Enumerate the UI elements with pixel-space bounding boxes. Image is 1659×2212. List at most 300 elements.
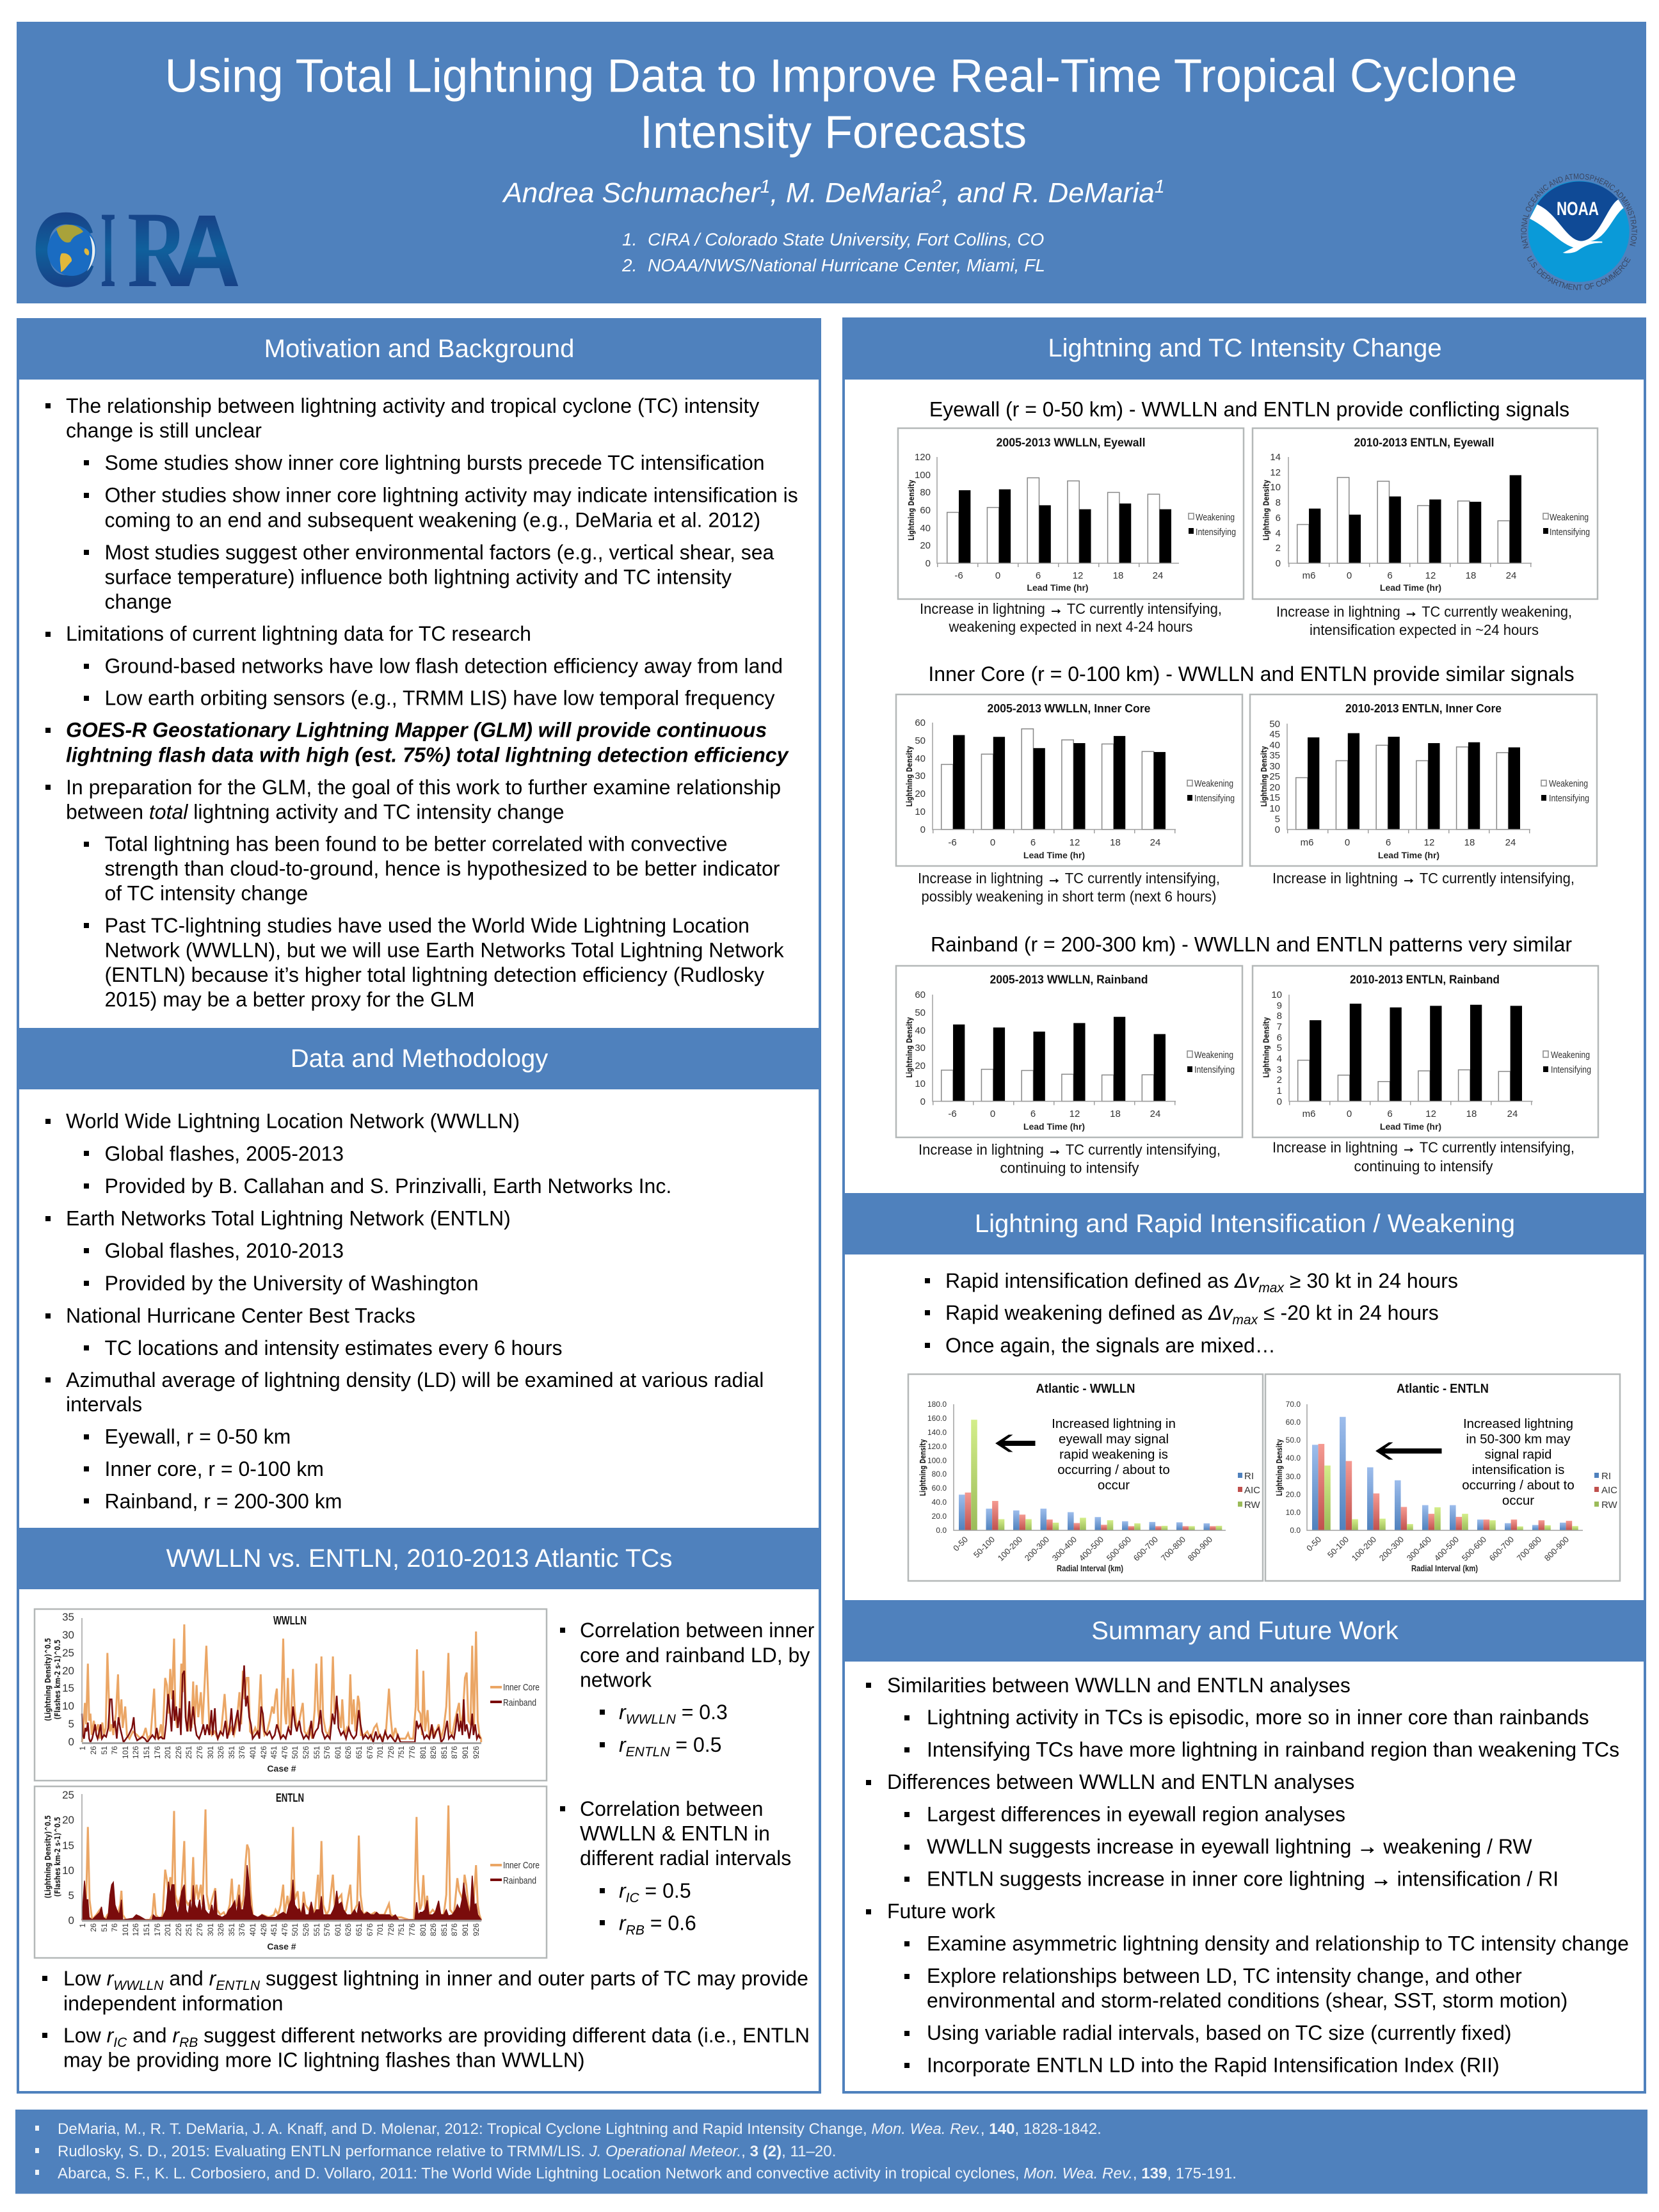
legend [1594, 1471, 1618, 1511]
annotation: occurring / about to [1462, 1478, 1575, 1493]
legend [1543, 512, 1590, 538]
axis titles: Lead Time (hr) [1023, 850, 1085, 860]
axis titles: Lightning Density [905, 746, 914, 806]
annotation [1462, 1416, 1575, 1508]
text block: rapid intensification bullets [925, 1269, 1458, 1357]
legend: RW [1244, 1500, 1261, 1511]
subheading: rainband: Rainband (r = 200-300 km) - WWLLN and ENTLN patterns very similar [931, 933, 1572, 956]
arrow [1376, 1443, 1441, 1459]
y ticks: 80 [920, 487, 931, 498]
x axis case labels: 251 [184, 1923, 193, 1936]
y ticks: 60.0 [1286, 1418, 1301, 1427]
legend: Inner Core [503, 1682, 540, 1693]
legend [1187, 778, 1235, 804]
text block: data bullets: TC locations and intensity estimates every 6 hours [105, 1336, 562, 1359]
legend [1541, 778, 1589, 804]
x ticks: 12 [1424, 837, 1434, 848]
x axis case labels: 851 [440, 1746, 449, 1759]
text block: rapid intensification bullets: Rapid weakening defined as Δv [945, 1301, 1232, 1324]
text block: correlation bullets: r [619, 1879, 627, 1902]
affiliations: CIRA / Colorado State University, Fort Collins, CO [648, 229, 1044, 250]
legend [1187, 1050, 1235, 1075]
y ticks [915, 452, 931, 569]
chart title: 2010-2013 ENTLN, Inner Core [1345, 702, 1502, 715]
icon: CIRA logo: R [127, 189, 189, 310]
y ticks: 40 [920, 523, 931, 534]
x axis case labels: 476 [280, 1746, 289, 1759]
x ticks: -6 [954, 570, 963, 581]
x axis case labels: 926 [472, 1746, 481, 1759]
y ticks: 0 [926, 558, 931, 569]
axis titles [907, 479, 1089, 593]
legend: Weakening [1549, 778, 1588, 789]
y ticks: 10 [1271, 990, 1282, 1000]
text block: low correlation bullets: IC [113, 2035, 127, 2050]
x ticks: 700-800 [1159, 1535, 1187, 1563]
y ticks: 20.0 [1286, 1490, 1301, 1499]
caption: rainband ENTLN: continuing to intensify [1354, 1158, 1493, 1174]
y axis labels [62, 1611, 74, 1748]
x axis case labels: 576 [323, 1923, 332, 1936]
text block: correlation bullets: network [580, 1668, 652, 1691]
annotation: rapid weakening is [1059, 1447, 1168, 1462]
x axis case labels: 101 [121, 1746, 130, 1759]
panel: title header [17, 22, 1646, 310]
caption: rainband ENTLN [1272, 1139, 1575, 1174]
text block: summary bullets: Future work [887, 1900, 996, 1923]
x axis case labels: 26 [89, 1746, 98, 1754]
heading: Data and Methodology [17, 1028, 821, 1089]
y ticks: 140.0 [927, 1428, 947, 1437]
y ticks: 45 [1269, 729, 1280, 740]
y axis labels [62, 1789, 74, 1927]
y axis labels: 10 [62, 1864, 74, 1877]
text block: data bullets: intervals [66, 1393, 142, 1416]
y ticks: 4 [1277, 1054, 1282, 1064]
x ticks: 6 [1030, 837, 1036, 848]
annotation: signal rapid [1485, 1447, 1551, 1462]
x axis case labels: 501 [291, 1923, 300, 1936]
axis titles: Lightning Density [905, 1017, 914, 1078]
x ticks: 6 [1387, 1109, 1393, 1119]
heading: WWLLN vs. ENTLN: WWLLN vs. ENTLN, 2010-2013 Atlantic TCs [166, 1544, 672, 1573]
chart: ENTLN time series [35, 1786, 547, 1958]
axis titles [905, 746, 1085, 860]
x axis case labels: 1 [78, 1923, 87, 1928]
y ticks: 1 [1277, 1086, 1282, 1096]
text block: motivation bullets: lightning flash data with high (est. 75%) total lightning detection efficiency [66, 744, 790, 767]
x axis case labels: 176 [153, 1746, 162, 1759]
text block: motivation bullets: Some studies show inner core lightning bursts precede TC intensification [105, 451, 765, 474]
series: inner core [82, 1806, 481, 1920]
axis titles: Radial Interval (km) [1411, 1563, 1478, 1573]
heading: Lightning and TC Intensity Change: Lightning and TC Intensity Change [1048, 334, 1442, 362]
legend: RI [1601, 1471, 1611, 1482]
y ticks: 40 [915, 753, 926, 764]
series: rainband [82, 1865, 481, 1920]
text block: motivation bullets: between total lightning activity and TC intensity change [66, 800, 565, 823]
x ticks: 200-300 [1023, 1535, 1051, 1563]
axis titles [1262, 479, 1441, 593]
chart title: 2005-2013 WWLLN, Inner Core [987, 702, 1151, 715]
text block: summary bullets: WWLLN suggests increase in eyewall lightning → weakening / RW [927, 1835, 1532, 1858]
text block: motivation bullets: Ground-based networks have low flash detection efficiency away from land [105, 654, 783, 677]
text block: low correlation bullets: independent information [63, 1992, 283, 2015]
text block: rapid intensification bullets: Rapid intensification defined as Δv [945, 1269, 1258, 1292]
axis titles [905, 1017, 1085, 1132]
x ticks: 50-100 [1326, 1535, 1350, 1560]
text block: correlation bullets: Correlation between inner [580, 1619, 815, 1642]
y ticks [1286, 1400, 1301, 1535]
y ticks: 12 [1270, 467, 1281, 478]
x ticks: 600-700 [1132, 1535, 1160, 1563]
text block: low correlation bullets: r [172, 2024, 180, 2047]
x axis case labels: 726 [387, 1746, 396, 1759]
x axis case labels: 426 [259, 1746, 268, 1759]
x axis case labels: 601 [333, 1746, 342, 1759]
caption: rainband WWLLN: Increase in lightning → TC currently intensifying, [918, 1141, 1221, 1158]
y ticks: 80.0 [932, 1470, 947, 1479]
axis titles: Lightning Density [1275, 1439, 1284, 1496]
text block: correlation bullets: ENTLN [626, 1745, 670, 1759]
authors: 1 [1155, 177, 1165, 197]
text block: low correlation bullets: Low r [63, 1967, 113, 1990]
axis titles: Lightning Density [1262, 479, 1271, 540]
x ticks: 0 [1347, 570, 1352, 581]
x axis case labels: 526 [301, 1923, 310, 1936]
y axis title [44, 1638, 62, 1721]
y ticks [927, 1400, 947, 1535]
y ticks: 7 [1277, 1022, 1282, 1032]
x ticks: 500-600 [1460, 1535, 1488, 1563]
axis titles [1260, 746, 1439, 860]
text block: low correlation bullets: r [209, 1967, 217, 1990]
y axis labels: 5 [68, 1889, 74, 1902]
text block: reference list: Abarca, S. F., K. L. Corbosiero, and D. Vollaro, 2011: The World Wide Lightning Location Network and convective activity in tropical cyclones, Mon. Wea. Rev., 139, 175-191. [58, 2165, 1237, 2183]
x ticks: 24 [1150, 837, 1160, 848]
legend: Intensifying [1550, 527, 1590, 538]
x axis case labels: 476 [280, 1923, 289, 1936]
legend: Weakening [1551, 1050, 1590, 1061]
y ticks: 10 [915, 806, 926, 817]
text block: data bullets: Azimuthal average of lightning density (LD) will be examined at various radial [66, 1368, 764, 1391]
y ticks: 20.0 [932, 1512, 947, 1521]
text block: correlation bullets: different radial intervals [580, 1847, 791, 1870]
y ticks: 14 [1270, 452, 1281, 463]
heading: Lightning and TC Intensity Change [842, 317, 1646, 380]
panel: references [15, 2110, 1647, 2194]
affiliations: 1. [622, 229, 637, 250]
y ticks: 0 [1277, 1096, 1282, 1107]
text block: low correlation bullets: suggest lightning in inner and outer parts of TC may provide [260, 1967, 808, 1990]
x axis case labels: 426 [259, 1923, 268, 1936]
y ticks: 8 [1277, 1011, 1282, 1022]
x ticks: 0 [1345, 837, 1350, 848]
x ticks: 24 [1153, 570, 1163, 581]
chart title: ENTLN [276, 1791, 304, 1804]
annotation [1052, 1416, 1176, 1493]
x ticks: -6 [948, 1109, 957, 1119]
x axis case labels: 676 [365, 1923, 374, 1936]
bars [959, 1420, 1222, 1530]
axis titles: Lead Time (hr) [1380, 1121, 1441, 1132]
legend: Rainband [503, 1697, 536, 1708]
y ticks: 60 [915, 990, 926, 1000]
legend [1543, 1050, 1591, 1075]
y axis labels: 0 [68, 1736, 74, 1748]
x axis case labels: 326 [216, 1923, 225, 1936]
x ticks: 12 [1070, 837, 1080, 848]
text block: low correlation bullets: may be providing more IC lightning flashes than WWLLN) [63, 2049, 585, 2072]
y axis labels: 5 [68, 1718, 74, 1730]
annotation: occurring / about to [1057, 1463, 1170, 1477]
x axis case labels: 176 [153, 1923, 162, 1936]
text block: rapid intensification bullets: Once again, the signals are mixed… [945, 1334, 1276, 1357]
bars [947, 478, 1171, 563]
text block: low correlation bullets: WWLLN [113, 1978, 164, 1993]
y axis title: (Flashes km-2 s-1)^0.5 [53, 1640, 62, 1719]
icon: NOAA logo: U.S. DEPARTMENT OF COMMERCE [1527, 256, 1631, 291]
y ticks: 20 [915, 789, 926, 799]
annotation: eyewall may signal [1059, 1432, 1169, 1447]
y ticks: 0.0 [1290, 1526, 1301, 1535]
legend [1189, 512, 1236, 538]
y ticks: 20 [915, 1061, 926, 1071]
text block: correlation bullets: = 0.5 [670, 1733, 721, 1756]
x axis case labels: 26 [89, 1923, 98, 1932]
icon: NOAA logo [1521, 173, 1637, 291]
x axis case labels: 701 [376, 1746, 385, 1759]
x axis case labels [78, 1923, 481, 1936]
caption: rainband ENTLN: Increase in lightning → TC currently intensifying, [1272, 1139, 1575, 1156]
bars [942, 1017, 1166, 1102]
x ticks: 18 [1466, 1109, 1477, 1119]
axis titles: Lightning Density [1262, 1017, 1271, 1078]
y ticks: 5 [1277, 1043, 1282, 1054]
text block: correlation bullets: RB [626, 1923, 645, 1938]
y ticks: 10.0 [1286, 1508, 1301, 1517]
x axis case labels: 201 [163, 1746, 172, 1759]
x ticks: 18 [1110, 1109, 1121, 1119]
text block: summary bullets: Similarities between WWLLN and ENTLN analyses [887, 1674, 1350, 1697]
x axis case labels: 926 [472, 1923, 481, 1936]
x ticks: 0 [990, 837, 995, 848]
y axis labels: 15 [62, 1839, 74, 1852]
x ticks: 600-700 [1487, 1535, 1516, 1563]
x ticks [1304, 1535, 1571, 1563]
y ticks: 60 [915, 717, 926, 728]
x axis case labels: 651 [355, 1746, 364, 1759]
y ticks: 30.0 [1286, 1472, 1301, 1481]
y ticks: 100.0 [927, 1456, 947, 1465]
x ticks: 50-100 [972, 1535, 997, 1560]
y ticks: 40.0 [932, 1498, 947, 1507]
y axis title: (Lightning Density)^0.5 [44, 1638, 52, 1721]
text block: motivation bullets: Past TC-lightning studies have used the World Wide Lightning Location [105, 914, 749, 937]
x axis case labels: 76 [110, 1746, 119, 1754]
text block: rapid intensification bullets: ≥ 30 kt in 24 hours [1284, 1269, 1458, 1292]
y ticks: 9 [1277, 1000, 1282, 1011]
text block: motivation bullets: coming to an end and subsequent weakening (e.g., DeMaria et al. 2012) [105, 508, 760, 531]
y ticks: 2 [1277, 1075, 1282, 1086]
legend: Weakening [1194, 778, 1233, 789]
x axis case labels: 876 [450, 1746, 459, 1759]
y ticks: 35 [1269, 750, 1280, 761]
axis titles [918, 1439, 1123, 1573]
x axis case labels: 826 [429, 1746, 438, 1759]
text block: motivation bullets: GOES-R Geostationary Lightning Mapper (GLM) will provide continuous [66, 719, 767, 742]
bars [1297, 475, 1521, 563]
x axis case labels: 651 [355, 1923, 364, 1936]
x axis case labels: 526 [301, 1746, 310, 1759]
x ticks: 6 [1386, 837, 1391, 848]
y ticks: 120 [915, 452, 931, 463]
y ticks [915, 990, 926, 1107]
text block: data bullets: National Hurricane Center Best Tracks [66, 1304, 415, 1327]
x axis case labels: 51 [100, 1923, 109, 1932]
legend: Weakening [1194, 1050, 1233, 1061]
chart title: 2010-2013 ENTLN, Rainband [1350, 974, 1500, 986]
y ticks: 20 [920, 540, 931, 551]
text block: summary bullets: Examine asymmetric lightning density and relationship to TC intensity change [927, 1932, 1629, 1955]
x axis case labels: 226 [174, 1746, 183, 1759]
text block: motivation bullets: The relationship between lightning activity and tropical cyclone (TC) intensity [66, 394, 759, 417]
x ticks: m6 [1302, 1109, 1315, 1119]
chart: ENTLN eyewall [1253, 428, 1598, 599]
y ticks [1271, 990, 1282, 1107]
y ticks: 120.0 [927, 1442, 947, 1451]
x ticks [1302, 1109, 1518, 1119]
x ticks: 400-500 [1077, 1535, 1105, 1563]
text block: correlation bullets: r [619, 1733, 627, 1756]
text block: motivation bullets: Most studies suggest other environmental factors (e.g., vertical shear, sea [105, 541, 774, 564]
bars [1312, 1417, 1578, 1530]
axis titles: Lead Time (hr) [1380, 582, 1441, 593]
text block: correlation bullets: = 0.6 [645, 1911, 696, 1934]
annotation: occur [1098, 1478, 1130, 1493]
y ticks: 10 [1269, 803, 1280, 814]
x ticks [1302, 570, 1516, 581]
text block: data bullets: Eyewall, r = 0-50 km [105, 1425, 291, 1448]
x ticks [948, 1109, 1160, 1119]
text block: low correlation bullets [42, 1967, 810, 2072]
y axis labels: 25 [62, 1647, 74, 1659]
caption: eyewall ENTLN [1276, 604, 1572, 638]
text block: correlation bullets: core and rainband LD, by [580, 1644, 810, 1667]
axis titles: Lightning Density [918, 1439, 927, 1496]
x axis case labels: 451 [269, 1746, 278, 1759]
heading: Lightning and Rapid Intensification / Weakening: Lightning and Rapid Intensification / Weakening [975, 1210, 1515, 1238]
axis titles: Lightning Density [1260, 746, 1269, 806]
caption: inner core WWLLN: possibly weakening in short term (next 6 hours) [922, 888, 1216, 905]
x axis case labels: 751 [397, 1923, 406, 1936]
x ticks: 6 [1030, 1109, 1036, 1119]
y ticks: 6 [1277, 1032, 1282, 1043]
caption: inner core WWLLN: Increase in lightning → TC currently intensifying, [918, 870, 1220, 886]
x axis case labels: 126 [131, 1923, 140, 1936]
text block: summary bullets: environmental and storm-related conditions (shear, SST, storm motion) [927, 1989, 1567, 2012]
text block: motivation bullets: Network (WWLLN), but we will use Earth Networks Total Lightning Network [105, 938, 785, 961]
annotation: Increased lightning in [1052, 1416, 1176, 1431]
x axis case labels [78, 1746, 481, 1759]
legend: Weakening [1196, 512, 1235, 523]
caption: inner core WWLLN [918, 870, 1220, 905]
legend: Intensifying [1194, 1064, 1235, 1075]
text block: low correlation bullets: and [163, 1967, 209, 1990]
caption: eyewall ENTLN: intensification expected in ~24 hours [1310, 621, 1539, 638]
authors: , M. DeMaria [770, 177, 931, 209]
text block: summary bullets [866, 1674, 1629, 2076]
authors: , and R. DeMaria [942, 177, 1155, 209]
legend [490, 1682, 540, 1708]
x ticks: 24 [1507, 1109, 1518, 1119]
text block: low correlation bullets: suggest different networks are providing different data (i.e., ENTLN [198, 2024, 810, 2047]
text block: motivation bullets: change [105, 590, 172, 613]
icon: CIRA logo [32, 189, 241, 310]
annotation: occur [1502, 1493, 1534, 1508]
text block: motivation bullets: Other studies show inner core lightning activity may indicate intensification is [105, 484, 798, 507]
x ticks: 400-500 [1432, 1535, 1461, 1563]
y ticks: 30 [915, 1043, 926, 1054]
x axis case labels: 801 [419, 1746, 428, 1759]
x ticks: 0 [1347, 1109, 1352, 1119]
chart: WWLLN time series [35, 1609, 547, 1781]
y ticks: 100 [915, 470, 931, 481]
text block: motivation bullets: change is still unclear [66, 419, 262, 442]
text block: low correlation bullets: Low r [63, 2024, 113, 2047]
chart: ENTLN rainband [1253, 966, 1598, 1137]
x axis case labels: 376 [237, 1746, 246, 1759]
y ticks: 20 [1269, 782, 1280, 793]
y ticks: 10 [915, 1078, 926, 1089]
axis titles [1275, 1439, 1478, 1573]
icon: CIRA logo: A [173, 193, 241, 308]
y ticks: 0 [1276, 558, 1281, 569]
heading: Lightning and Rapid Intensification / Weakening [842, 1193, 1646, 1254]
text block: data bullets [45, 1110, 764, 1513]
x ticks: 24 [1150, 1109, 1160, 1119]
legend [490, 1860, 540, 1886]
chart: Atlantic WWLLN [908, 1374, 1263, 1581]
y ticks: 0 [1275, 824, 1280, 835]
legend: Inner Core [503, 1860, 540, 1871]
y ticks: 30 [915, 771, 926, 781]
title [165, 50, 1517, 158]
annotation: intensification is [1472, 1463, 1564, 1477]
y ticks: 0 [920, 824, 926, 835]
x axis case labels: 776 [408, 1923, 417, 1936]
x ticks: 18 [1466, 570, 1476, 581]
bars [1296, 733, 1520, 830]
x axis case labels: 501 [291, 1746, 300, 1759]
y ticks: 5 [1275, 814, 1280, 824]
y ticks: 15 [1269, 792, 1280, 803]
x ticks: 6 [1036, 570, 1041, 581]
y ticks: 60 [920, 505, 931, 516]
text block: data bullets: Inner core, r = 0-100 km [105, 1457, 324, 1480]
text block: motivation bullets: strength than cloud-to-ground, hence is hypothesized to be better indicator [105, 857, 780, 880]
x axis case labels: 576 [323, 1746, 332, 1759]
affiliations: 2. [621, 255, 637, 275]
x ticks [948, 837, 1160, 848]
x ticks: 12 [1070, 1109, 1080, 1119]
y ticks: 30 [1269, 761, 1280, 772]
x ticks: 18 [1464, 837, 1475, 848]
x ticks: 700-800 [1515, 1535, 1543, 1563]
x axis title: Case # [267, 1763, 296, 1774]
y axis labels: 35 [62, 1611, 74, 1623]
affiliations [621, 229, 1045, 275]
